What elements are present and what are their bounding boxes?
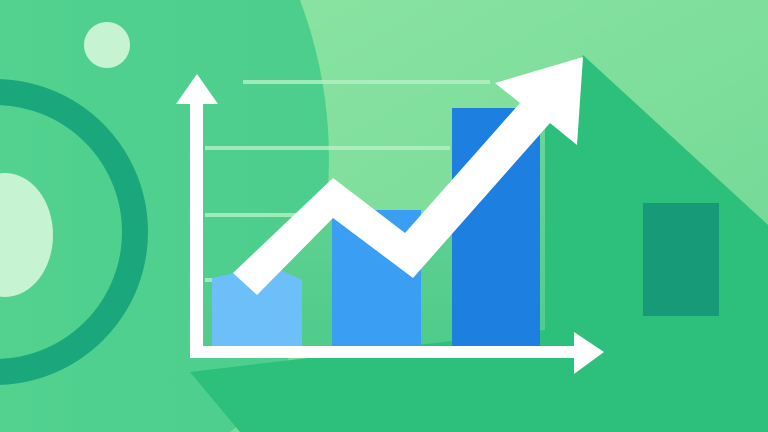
background blob: left green bbox=[0, 0, 329, 432]
trend arrow bbox=[233, 57, 583, 295]
bars bbox=[212, 108, 540, 348]
axes bbox=[176, 74, 604, 374]
background: mid-green chart area bbox=[205, 115, 545, 350]
ring: teal arc bbox=[0, 92, 135, 372]
grid lines bbox=[205, 82, 490, 280]
background: dark diagonal shape bbox=[190, 55, 768, 432]
icon: small light circle bbox=[84, 22, 130, 68]
teal rectangle bbox=[643, 203, 719, 316]
blob: light inner bbox=[0, 173, 53, 297]
